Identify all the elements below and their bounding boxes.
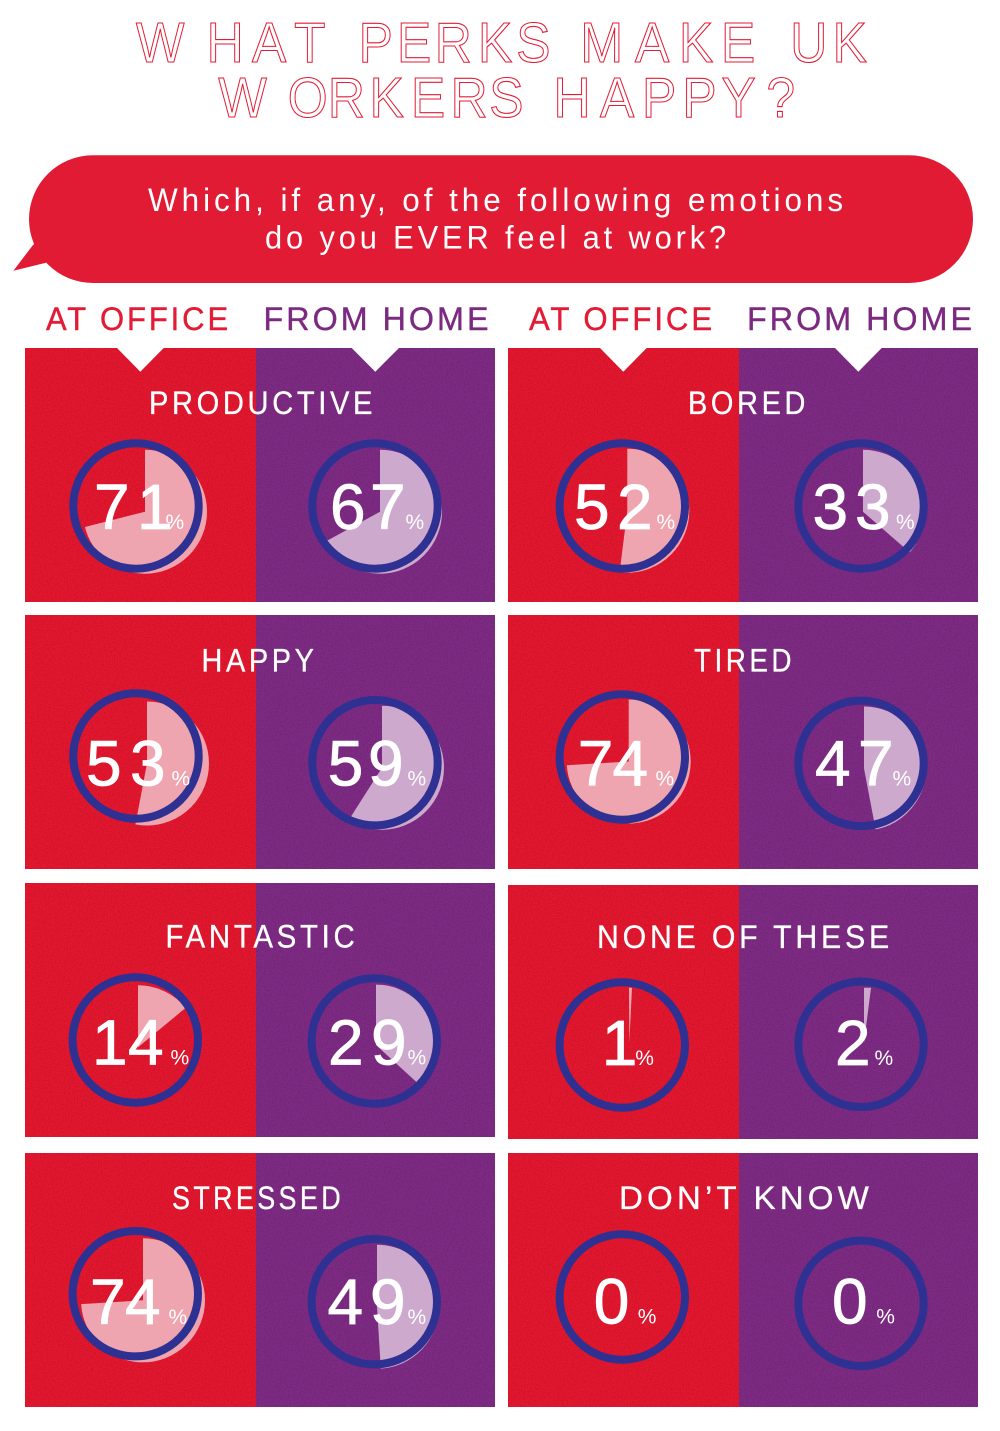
title: WHAT PERKS MAKE UK [136,12,867,75]
pie: office 53%: 53 [86,728,166,800]
panel: none of these [508,885,978,1139]
pie: office 74%: 74 [90,1266,161,1338]
pie: home 67% [312,443,438,569]
pie: office 14% [73,977,198,1103]
speech bubble question: do you EVER feel at work? [265,220,730,256]
pie: home 0% [798,1241,924,1366]
column headings: AT OFFICE [46,301,231,337]
panel: tired [508,615,978,869]
pie: office 52%: 52 [574,471,653,543]
panel: bored: BORED [688,385,809,421]
pie: office 71%: % [166,511,184,534]
title: WORKERS HAPPY? [218,67,795,130]
pie: office 14%: % [170,1046,189,1069]
pie: office 74%: 74 [578,728,648,800]
panel: bored [508,348,978,602]
pie: office 0% [560,1234,685,1360]
pie: office 74%: % [656,768,674,791]
pie: home 49%: 49 [328,1266,406,1338]
speech bubble question [13,155,973,283]
panel: stressed [25,1153,495,1407]
pie: office 0%: 0 [594,1265,629,1337]
pie: home 47%: % [892,768,911,791]
pie: home 29%: 29 [328,1006,407,1078]
pie: office 74% [560,694,685,820]
pie: office 1%: % [635,1047,654,1070]
panel: productive [25,348,495,602]
pie: office 74% [73,1231,198,1356]
column headings: FROM HOME [747,301,975,337]
pie: home 2%: 2 [835,1007,871,1079]
pie: office 0%: % [638,1305,656,1328]
pie: home 29% [312,978,437,1104]
pie: home 33% [798,443,924,569]
panel: none of these: NONE OF THESE [597,919,893,955]
panel: tired: TIRED [694,642,795,678]
pie: home 59% [312,700,438,825]
speech bubble question: Which, if any, of the following emotions [148,182,847,218]
title [136,12,867,130]
pie: office 53%: % [172,768,190,791]
pie: home 33%: 33 [812,471,891,543]
pie: office 52% [560,443,685,569]
pie: home 0%: 0 [832,1265,868,1337]
column headings [46,301,975,337]
pie: home 67%: % [406,511,424,534]
pie: office 53% [73,693,199,819]
pie: home 49%: % [408,1306,426,1329]
panel: fantastic [25,883,495,1137]
pie: home 59%: 59 [328,728,404,800]
pie: home 49% [312,1239,437,1364]
column headings: AT OFFICE [529,301,715,337]
pie: office 52%: % [656,511,675,534]
panel: productive: PRODUCTIVE [149,385,376,421]
column headings: FROM HOME [264,301,492,337]
pie: home 2% [798,982,924,1107]
pie: office 71%: 71 [94,471,173,543]
pie: home 33%: % [896,511,915,534]
pie: home 2%: % [874,1047,893,1070]
pie: office 1%: 1 [602,1007,637,1079]
panel: stressed: STRESSED [172,1180,344,1216]
pie: home 0%: % [876,1305,895,1328]
panel: happy: HAPPY [202,642,318,678]
pie: home 47%: 47 [815,728,894,800]
panel: don't know [508,1153,978,1407]
pie: office 71% [73,443,199,569]
panel: don't know: DON’T KNOW [619,1180,873,1216]
pie: office 14%: 14 [92,1006,164,1078]
panel: fantastic: FANTASTIC [166,919,358,955]
pie: home 59%: % [408,768,426,791]
pie: home 29%: % [408,1046,426,1069]
panel: happy [25,615,495,869]
pie: office 1% [560,982,685,1108]
pie: office 74%: % [168,1306,187,1329]
pie: home 47% [798,701,924,826]
pie: home 67%: 67 [330,471,406,543]
